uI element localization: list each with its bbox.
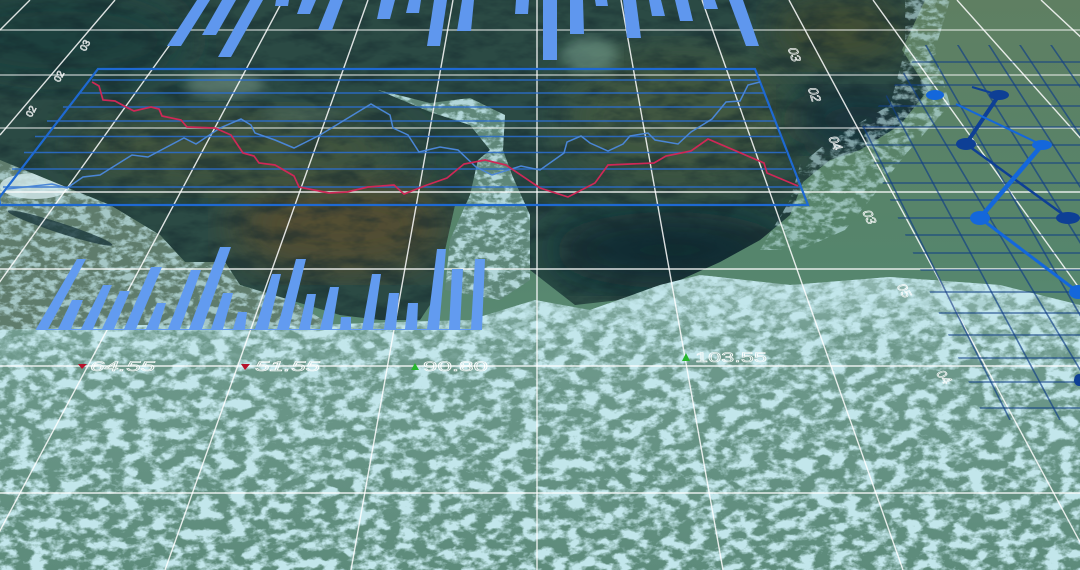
axis labels left (24, 38, 93, 119)
series: red line (92, 82, 798, 197)
rock: dark coastal shelf (0, 0, 928, 320)
marker: green up triangle (682, 353, 690, 361)
foam: breaking surf on right rock edge (760, 0, 950, 250)
node chart: navy series (956, 87, 1080, 386)
axis labels right: 03 (859, 209, 880, 225)
node chart: bright blue series (926, 90, 1080, 299)
marker: red down triangle (78, 364, 87, 369)
value readout: 90.80: 90.80 (423, 358, 488, 374)
axis labels left: 02 (24, 104, 39, 119)
axis labels left: 02 (52, 69, 67, 84)
axis labels right: 04 (825, 135, 846, 151)
value readout: 90.80 (411, 358, 488, 374)
axis labels right: 04 (933, 369, 956, 386)
chart rows (3, 80, 800, 187)
value readout: 103.55: 103.55 (695, 349, 767, 365)
mid shore: rocks and surf left (0, 160, 322, 330)
axis labels right: 05 (893, 283, 915, 299)
axis labels right: 02 (805, 87, 824, 102)
chart frame (0, 69, 808, 205)
line chart panel (0, 69, 808, 205)
right mesh grid (862, 45, 1080, 420)
value readout: 64.55: 64.55 (90, 358, 155, 374)
axis labels right: 03 (785, 47, 804, 62)
marker: green up triangle (411, 363, 419, 370)
value readout: 51.55: 51.55 (255, 358, 320, 374)
bottom bar chart (36, 247, 485, 330)
value readout: 64.55 (78, 358, 155, 374)
axis labels right (785, 47, 956, 386)
marker: red down triangle (241, 364, 250, 370)
value readout: 51.55 (241, 358, 320, 374)
value readout: 103.55 (682, 349, 767, 365)
sea: foam field (0, 270, 1080, 570)
channel: foam-filled rock gully (378, 90, 530, 300)
top bar chart (mirrored) (167, 0, 759, 60)
series: blue line (7, 82, 760, 189)
axis labels left: 03 (78, 38, 93, 53)
